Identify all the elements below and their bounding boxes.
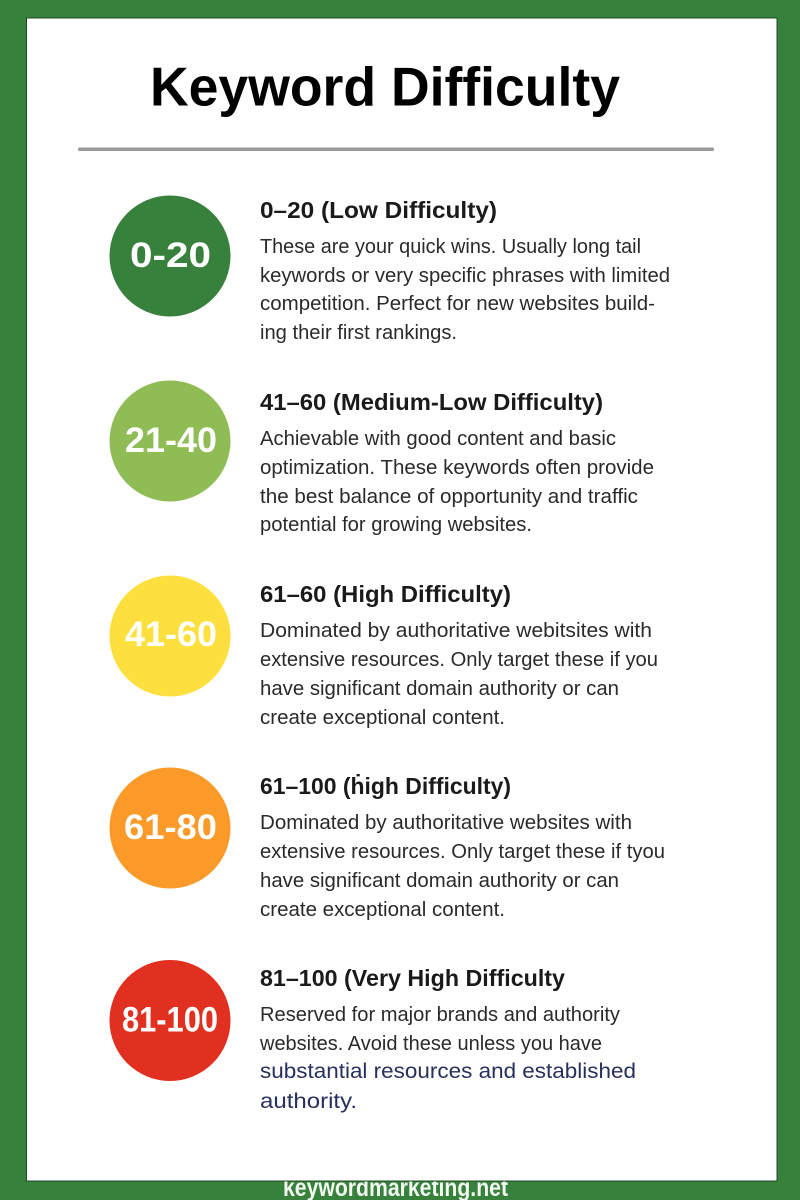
tier: 0-20 xyxy=(110,196,670,344)
description: 81-100 very high: substantial resources and established xyxy=(260,1060,636,1083)
description: 61-60 high: create exceptional content. xyxy=(260,706,505,729)
heading: 61-60 high: 61–60 (High Difficulty) xyxy=(260,581,511,607)
title: Keyword Difficulty xyxy=(150,56,620,118)
heading: 81-100 very high: 81–100 (Very High Difficulty xyxy=(260,965,565,991)
description: 61-100 high: create exceptional content. xyxy=(260,898,505,921)
heading: 41-60 medium-low: 41–60 (Medium-Low Difficulty) xyxy=(260,389,603,415)
tier: 81-100 xyxy=(110,960,636,1113)
badge: 81-100: 81-100 xyxy=(122,1000,218,1040)
description: 0-20: ing their first rankings. xyxy=(260,321,457,344)
description: medium-low: potential for growing websites. xyxy=(260,513,532,536)
description: 0-20: These are your quick wins. Usually long tail xyxy=(260,235,641,258)
badge: 0-20 xyxy=(110,196,230,316)
badge: 0-20: 0-20 xyxy=(130,236,211,275)
description: 61-100 high: extensive resources. Only target these if tyou xyxy=(260,840,665,863)
badge: 81-100 xyxy=(110,960,230,1081)
description: 61-60 high: Dominated by authoritative webitsites with xyxy=(260,619,652,642)
badge: 21-40 xyxy=(110,380,230,502)
tier: 21-40 xyxy=(110,380,654,536)
description: 61-60 high: extensive resources. Only target these if you xyxy=(260,648,658,671)
badge: 61-80 xyxy=(110,768,230,888)
description: 61-60 high: have significant domain authority or can xyxy=(260,677,619,700)
description: medium-low: Achievable with good content and basic xyxy=(260,427,616,450)
heading: 0-20: 0–20 (Low Difficulty) xyxy=(260,197,497,223)
description: medium-low: optimization. These keywords often provide xyxy=(260,456,654,479)
description: 61-100 high: Dominated by authoritative websites with xyxy=(260,811,632,834)
badge: 41-60 xyxy=(110,576,230,696)
heading: 61-100 high: 61–100 (ḣigh Difficulty) xyxy=(260,773,511,799)
description: 61-100 high xyxy=(260,811,665,921)
badge: 41-60: 41-60 xyxy=(125,615,217,654)
tier: 61-80 xyxy=(110,768,665,921)
description: 81-100 very high: authority. xyxy=(260,1090,357,1113)
tier: 41-60 xyxy=(110,576,658,729)
description: 81-100 very high: Reserved for major brands and authority xyxy=(260,1003,621,1026)
description: 61-100 high: have significant domain authority or can xyxy=(260,869,619,892)
description: 61-60 high xyxy=(260,619,658,729)
description: medium-low xyxy=(260,427,654,536)
description: 81-100 very high xyxy=(259,1003,636,1113)
badge: 21-40: 21-40 xyxy=(125,421,217,460)
description: 0-20: competition. Perfect for new websites build- xyxy=(260,292,655,315)
description: medium-low: the best balance of opportunity and traffic xyxy=(260,485,638,508)
description: 0-20 xyxy=(260,235,670,344)
description: 81-100 very high: websites. Avoid these unless you have xyxy=(259,1032,602,1055)
description: 0-20: keywords or very specific phrases with limited xyxy=(260,264,670,287)
badge: 61-80: 61-80 xyxy=(124,808,217,847)
